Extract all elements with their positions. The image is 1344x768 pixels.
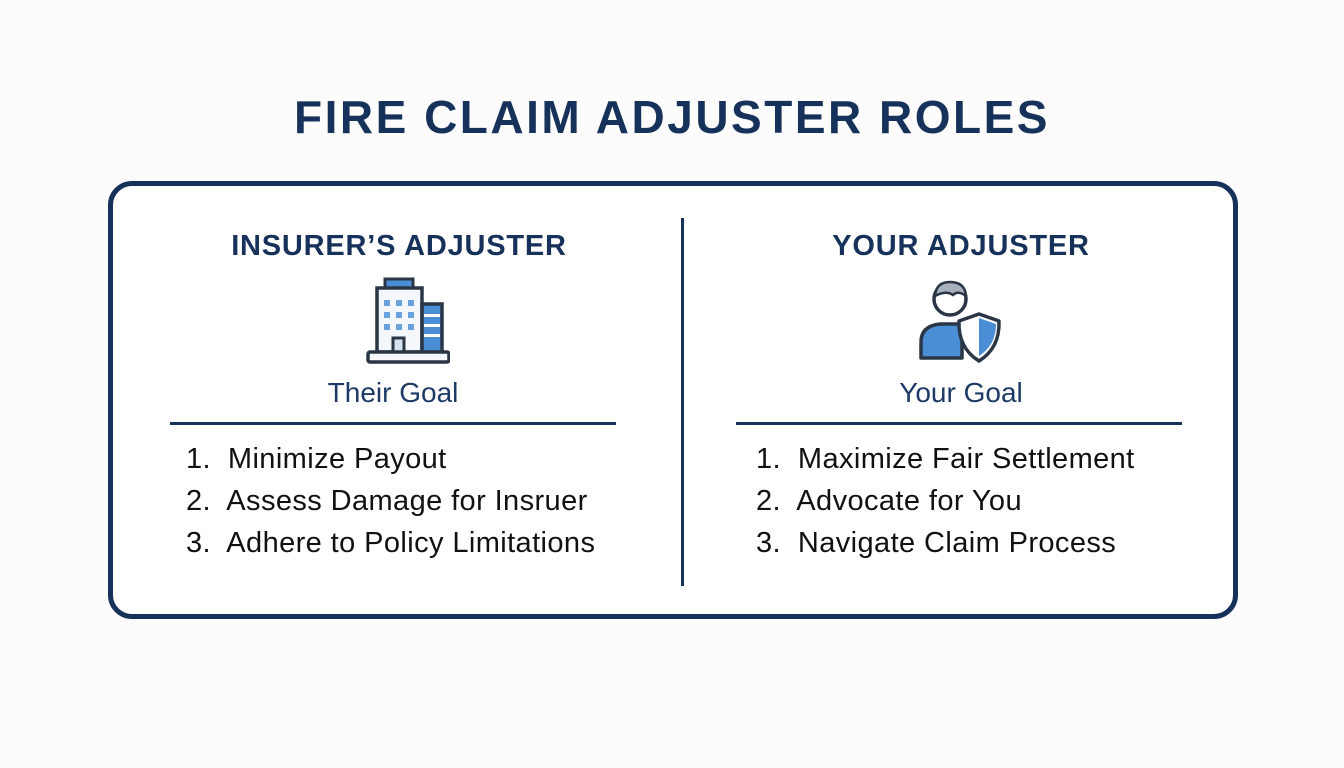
list: insurer goals: 2. Assess Damage for Insruer: [186, 485, 588, 517]
list: insurer goals: 3. Adhere to Policy Limitations: [186, 527, 595, 559]
divider: [681, 218, 684, 586]
icon: person with shield: [919, 280, 1001, 363]
heading: your adjuster: YOUR ADJUSTER: [832, 230, 1090, 262]
icon: building: [366, 278, 450, 364]
heading: insurer's adjuster: INSURER’S ADJUSTER: [231, 230, 567, 262]
list: your goals: 2. Advocate for You: [756, 485, 1022, 517]
title: FIRE CLAIM ADJUSTER ROLES: [294, 91, 1050, 143]
list: your goals: 1. Maximize Fair Settlement: [756, 443, 1135, 475]
rule left: [170, 422, 616, 425]
rule right: [736, 422, 1182, 425]
subheading: their goal: Their Goal: [328, 377, 458, 408]
subheading: your goal: Your Goal: [899, 377, 1023, 408]
list: your goals: 3. Navigate Claim Process: [756, 527, 1116, 559]
panel: comparison box: [108, 181, 1238, 619]
list: insurer goals: 1. Minimize Payout: [186, 443, 447, 475]
list: insurer goals: [186, 443, 595, 559]
list: your goals: [756, 443, 1135, 559]
